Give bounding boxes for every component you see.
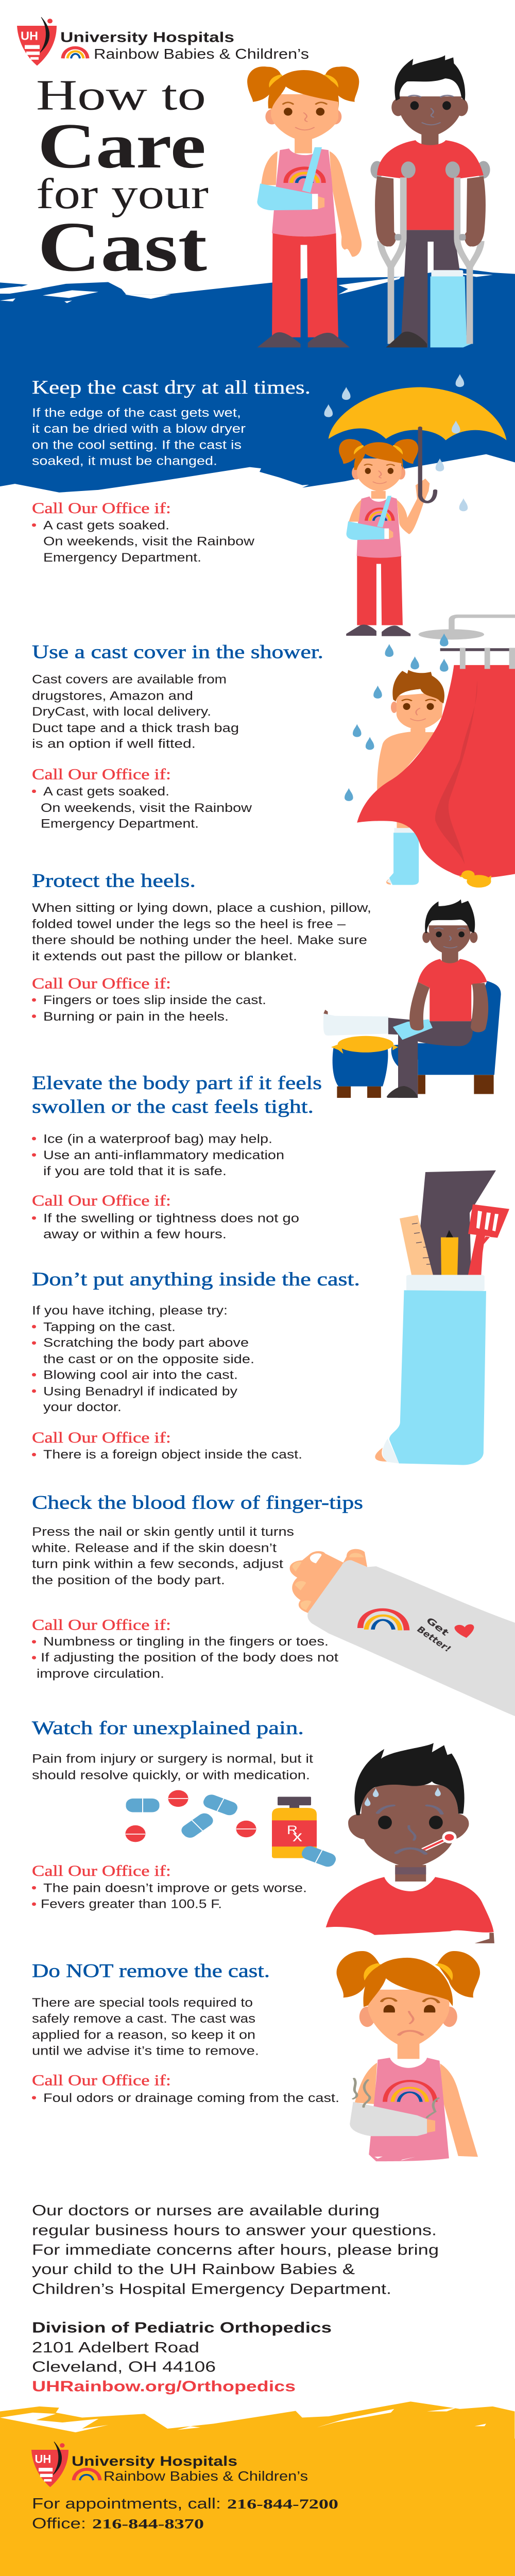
body text: Pain from injury or surgery is normal, but it bbox=[32, 1752, 314, 1766]
call our office heading: Call Our Office if: bbox=[32, 500, 171, 517]
icon: thermometer bbox=[424, 1832, 457, 1850]
icon: UH shield bbox=[17, 17, 57, 66]
logo name: University Hospitals bbox=[60, 30, 234, 45]
body text: When sitting or lying down, place a cushion, pillow, bbox=[32, 901, 371, 914]
call list: Emergency Department. bbox=[43, 550, 201, 564]
tips list: Scratching the body part above bbox=[43, 1335, 249, 1350]
title: for your bbox=[36, 170, 209, 217]
body text: it extends out past the pillow or blanket. bbox=[32, 949, 297, 963]
call our office heading: Call Our Office if: bbox=[32, 1616, 171, 1634]
body text: until we advise it’s time to remove. bbox=[32, 2044, 259, 2058]
icon: heart bbox=[455, 1624, 474, 1638]
tips list: Use an anti-inflammatory medication bbox=[43, 1148, 284, 1162]
title: Cast bbox=[38, 208, 207, 286]
body text: is an option if well fitted. bbox=[32, 737, 196, 751]
call list: Numbness or tingling in the fingers or toes. bbox=[43, 1634, 329, 1649]
illustration: sick boy with thermometer bbox=[326, 1743, 494, 1943]
body text bbox=[32, 1995, 259, 2058]
illustration: objects stuck in a leg cast bbox=[375, 1166, 509, 1465]
body text: turn pink within a few seconds, adjust bbox=[32, 1557, 284, 1571]
call list bbox=[32, 518, 255, 564]
call list: On weekends, visit the Rainbow bbox=[43, 534, 255, 548]
logo: University Hospitals Rainbow Babies and Children's bbox=[17, 17, 309, 66]
call list: There is a foreign object inside the cast. bbox=[43, 1447, 302, 1461]
tips list: Blowing cool air into the cast. bbox=[43, 1368, 238, 1382]
call list: If adjusting the position of the body does not bbox=[41, 1650, 339, 1664]
tips list: Ice (in a waterproof bag) may help. bbox=[43, 1132, 272, 1146]
heading: Watch for unexplained pain. bbox=[32, 1717, 304, 1738]
heading: Keep the cast dry at all times. bbox=[32, 377, 311, 398]
icon: tablets bbox=[126, 1790, 256, 1842]
body text bbox=[31, 1524, 294, 1587]
body text: the position of the body part. bbox=[32, 1573, 225, 1587]
section: keep the cast dry bbox=[32, 377, 311, 564]
heading: Elevate the body part if it feels bbox=[32, 1073, 322, 1093]
call list: A cast gets soaked. bbox=[43, 518, 169, 532]
title: How to bbox=[36, 71, 206, 119]
call list: Emergency Department. bbox=[41, 817, 199, 831]
body text bbox=[32, 901, 371, 963]
body text: there should be nothing under the heel. Make sure bbox=[32, 933, 367, 947]
call list: If the swelling or tightness does not go bbox=[43, 1211, 299, 1225]
address block bbox=[32, 2319, 332, 2395]
appointment phone bbox=[32, 2496, 338, 2512]
logo subname: Rainbow Babies & Children’s bbox=[104, 2469, 308, 2484]
office phone: 216-844-8370 bbox=[92, 2517, 204, 2532]
call list: A cast gets soaked. bbox=[43, 784, 169, 799]
blue brush band background bbox=[0, 268, 515, 493]
closing paragraph: regular business hours to answer your questions. bbox=[32, 2222, 437, 2239]
call our office heading: Call Our Office if: bbox=[32, 975, 171, 992]
body text: should resolve quickly, or with medication. bbox=[32, 1768, 310, 1782]
icon: rubber duck bbox=[459, 870, 491, 888]
appointment phone: 216-844-7200 bbox=[227, 2497, 338, 2512]
icon: hand bbox=[290, 1549, 367, 1614]
section: cast cover in shower bbox=[32, 641, 323, 831]
heading: Use a cast cover in the shower. bbox=[32, 641, 323, 663]
icon: Rx bottle: x bbox=[293, 1828, 303, 1845]
closing paragraph: Children’s Hospital Emergency Department. bbox=[32, 2281, 391, 2297]
address block: 2101 Adelbert Road bbox=[32, 2339, 199, 2355]
yellow footer panel bbox=[0, 2401, 515, 2576]
call list: On weekends, visit the Rainbow bbox=[41, 801, 252, 815]
body text bbox=[32, 405, 246, 468]
tips list: If you have itching, please try: bbox=[32, 1303, 228, 1317]
call list: away or within a few hours. bbox=[43, 1227, 227, 1241]
tips list: the cast or on the opposite side. bbox=[43, 1352, 254, 1366]
call list bbox=[32, 1881, 307, 1911]
office phone bbox=[32, 2515, 204, 2532]
heading: Do NOT remove the cast. bbox=[32, 1960, 270, 1981]
illustration: boy in shower behind curtain bbox=[345, 616, 515, 888]
tips list bbox=[32, 1303, 254, 1414]
closing paragraph bbox=[32, 2202, 439, 2297]
icon: ruler bbox=[400, 1215, 434, 1277]
call our office heading: Call Our Office if: bbox=[32, 1192, 171, 1209]
call list bbox=[32, 993, 266, 1023]
tips list: if you are told that it is safe. bbox=[43, 1164, 227, 1178]
title: Care bbox=[38, 110, 206, 181]
call list: Foul odors or drainage coming from the cast. bbox=[43, 2091, 339, 2105]
call our office heading: Call Our Office if: bbox=[32, 1862, 171, 1879]
icon: Rx bottle: R bbox=[287, 1823, 298, 1837]
illustration: girl with arm sling bbox=[247, 66, 362, 347]
body text: drugstores, Amazon and bbox=[32, 689, 193, 703]
body text: safely remove a cast. The cast was bbox=[32, 2011, 255, 2025]
heading: Don’t put anything inside the cast. bbox=[32, 1268, 360, 1290]
body text bbox=[32, 672, 239, 751]
tips list: Using Benadryl if indicated by bbox=[43, 1384, 238, 1398]
closing paragraph: For immediate concerns after hours, please bring bbox=[32, 2242, 439, 2258]
heading: Protect the heels. bbox=[32, 870, 196, 891]
call list bbox=[32, 784, 252, 831]
section: do not remove the cast bbox=[32, 1960, 339, 2105]
address block: Cleveland, OH 44106 bbox=[32, 2359, 216, 2375]
closing paragraph: Our doctors or nurses are available during bbox=[32, 2202, 380, 2218]
closing paragraph: your child to the UH Rainbow Babies & bbox=[32, 2261, 355, 2278]
logo name: University Hospitals bbox=[72, 2453, 237, 2469]
illustration: boy seated with leg on cushion bbox=[323, 900, 501, 1098]
cast doodle text: Get bbox=[423, 1616, 451, 1638]
section: unexplained pain bbox=[32, 1717, 314, 1911]
body text: it can be dried with a blow dryer bbox=[32, 421, 246, 435]
call list: Fevers greater than 100.5 F. bbox=[41, 1897, 222, 1911]
icon: spatula bbox=[468, 1205, 509, 1277]
cast doodle text: Better! bbox=[415, 1625, 453, 1654]
address block: UHRainbow.org/Orthopedics bbox=[32, 2378, 296, 2395]
title bbox=[36, 71, 209, 286]
office phone: Office: bbox=[32, 2515, 86, 2532]
body text: Press the nail or skin gently until it turns bbox=[32, 1524, 294, 1538]
body text: Cast covers are available from bbox=[32, 672, 227, 686]
section: protect the heels bbox=[32, 870, 371, 1023]
tips list: Tapping on the cast. bbox=[43, 1320, 176, 1334]
call list: Burning or pain in the heels. bbox=[43, 1009, 229, 1023]
icon: capsule by bottle bbox=[299, 1844, 338, 1869]
icon: pencil bbox=[441, 1230, 458, 1277]
heading: swollen or the cast feels tight. bbox=[32, 1096, 314, 1117]
icon: UH shield bbox=[31, 2442, 68, 2487]
illustration: boy on crutches with leg cast bbox=[370, 55, 490, 347]
section: check the blood flow bbox=[31, 1492, 363, 1681]
call our office heading: Call Our Office if: bbox=[32, 766, 171, 783]
call list bbox=[32, 1634, 339, 1681]
body text: soaked, it must be changed. bbox=[32, 454, 217, 468]
body text: applied for a reason, so keep it on bbox=[32, 2028, 255, 2042]
body text: If the edge of the cast gets wet, bbox=[32, 405, 241, 420]
section: elevate the body part bbox=[32, 1073, 322, 1241]
icon: UH shield: UH bbox=[21, 30, 38, 43]
heading: Check the blood flow of finger-tips bbox=[32, 1492, 363, 1513]
illustration: girl with umbrella in rain bbox=[324, 374, 506, 636]
illustration: hand with arm cast bbox=[290, 1549, 515, 1716]
icon: UH shield: UH bbox=[35, 2453, 51, 2466]
icon: Rx bottle bbox=[272, 1797, 317, 1858]
icon: arm cast bbox=[307, 1560, 515, 1716]
body text: folded towel under the legs so the heel is free – bbox=[32, 917, 346, 931]
call our office heading: Call Our Office if: bbox=[32, 2072, 171, 2089]
icon: capsules bbox=[126, 1793, 240, 1840]
call list: improve circulation. bbox=[37, 1667, 164, 1681]
icon: leg cast bbox=[375, 1275, 486, 1465]
body text: DryCast, with local delivery. bbox=[32, 704, 211, 719]
call list: Fingers or toes slip inside the cast. bbox=[43, 993, 266, 1007]
icon: dark rod bbox=[418, 1171, 496, 1277]
body text bbox=[32, 1752, 314, 1782]
illustration: pills and prescription bottle bbox=[126, 1790, 338, 1869]
call list bbox=[32, 1211, 299, 1241]
appointment phone: For appointments, call: bbox=[32, 2496, 221, 2512]
section: don't put anything inside the cast bbox=[32, 1268, 360, 1461]
call list: The pain doesn’t improve or gets worse. bbox=[43, 1881, 307, 1895]
address block: Division of Pediatric Orthopedics bbox=[32, 2319, 332, 2336]
body text: There are special tools required to bbox=[32, 1995, 253, 2009]
illustration: sad girl with smelly cast bbox=[336, 1951, 480, 2161]
logo subname: Rainbow Babies & Children’s bbox=[94, 47, 309, 62]
tips list bbox=[32, 1132, 284, 1178]
heading bbox=[32, 1073, 322, 1117]
body text: on the cool setting. If the cast is bbox=[32, 438, 242, 452]
icon: logo rainbow bbox=[63, 48, 88, 58]
icon: logo rainbow bbox=[74, 2469, 100, 2480]
tips list: your doctor. bbox=[43, 1400, 122, 1414]
body text: Duct tape and a thick trash bag bbox=[32, 721, 239, 735]
icon: cast rainbow bbox=[360, 1609, 407, 1630]
body text: white. Release and if the skin doesn’t bbox=[31, 1541, 277, 1555]
call our office heading: Call Our Office if: bbox=[32, 1429, 171, 1446]
footer logo bbox=[31, 2442, 308, 2487]
